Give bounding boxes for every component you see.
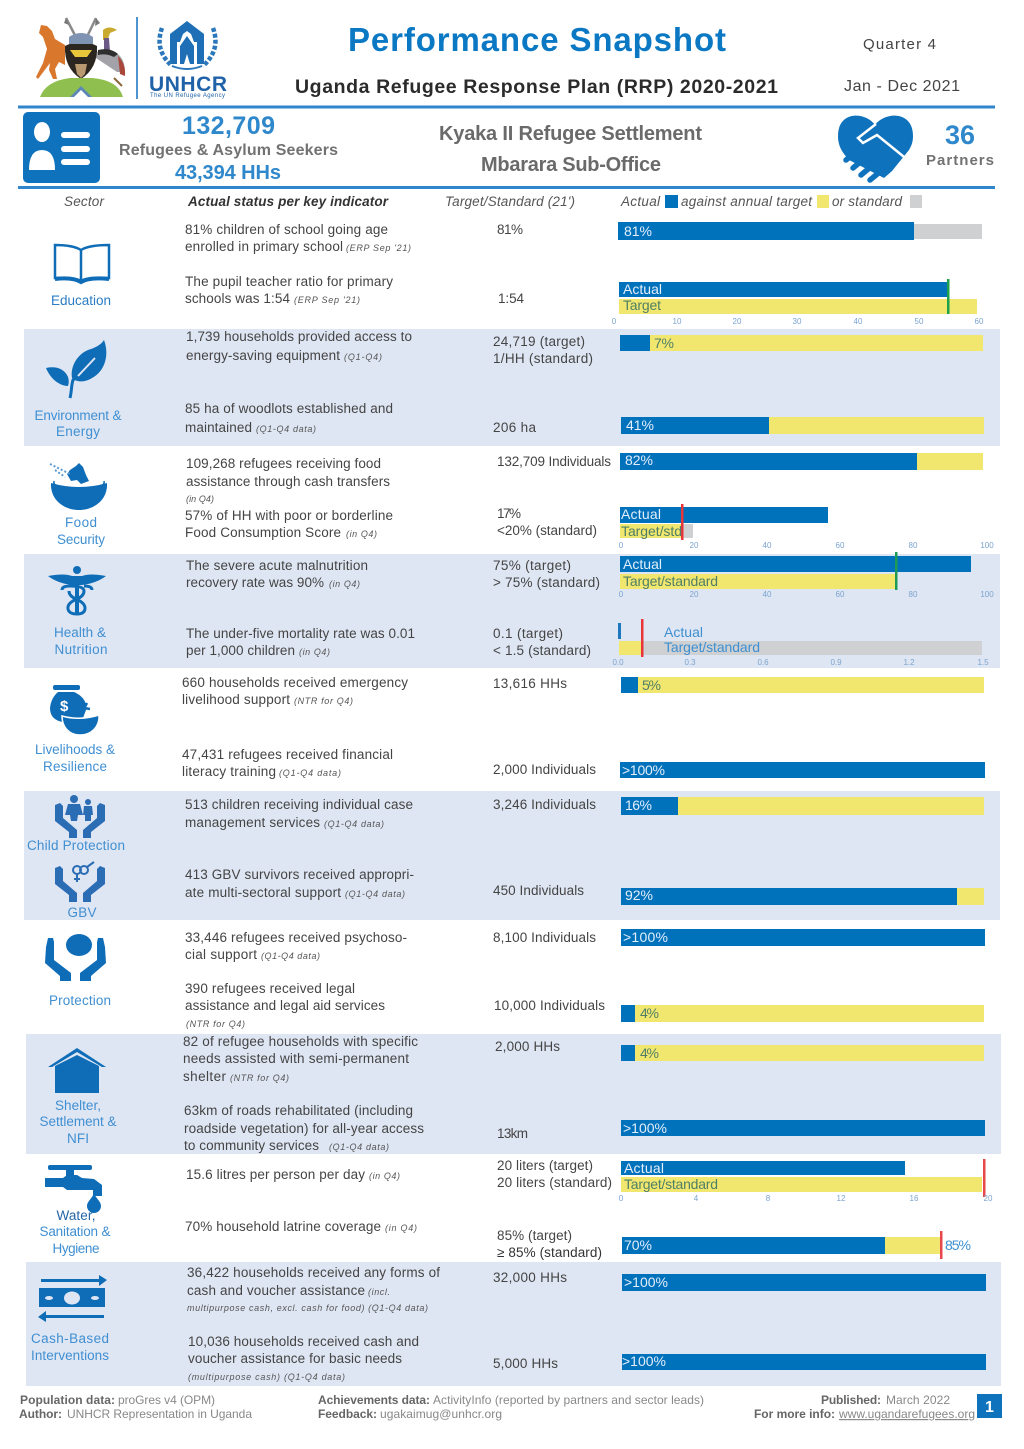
indicator: latrine coverage: ≥ 85% (standard) xyxy=(497,1245,602,1260)
indicator: malnutrition recovery: 75% (target) xyxy=(493,558,571,573)
indicator: latrine coverage xyxy=(185,1219,602,1260)
footer: achievements source xyxy=(318,1393,704,1421)
chart: food consumption score: 40 xyxy=(763,541,772,550)
indicator: emergency livelihood support: 13,616 HHs xyxy=(493,676,567,691)
column headers xyxy=(64,194,922,209)
chart: litres per person: Actual xyxy=(624,1160,664,1176)
indicator: emergency livelihood support: livelihood support xyxy=(182,692,290,707)
indicator: legal assistance xyxy=(185,981,605,1029)
bar: cash and voucher over 100% xyxy=(622,1274,986,1291)
bar: case management 16% xyxy=(621,797,984,815)
icon: UNHCR logo: UNHCR xyxy=(149,73,227,96)
indicator: under-five mortality: (in Q4) xyxy=(299,647,330,657)
bar: cash and voucher over 100%: >100% xyxy=(624,1274,668,1290)
chart: pupil teacher ratio: 60 xyxy=(975,317,984,326)
chart: food consumption score: 0 xyxy=(619,541,624,550)
population count: 132,709 xyxy=(182,112,275,140)
indicator: financial literacy: 47,431 refugees received financial xyxy=(182,747,393,762)
chart: litres per person: 20 xyxy=(984,1194,993,1203)
icon: handshake heart xyxy=(838,116,913,180)
bar: psychosocial over 100% xyxy=(621,929,985,946)
indicator: financial literacy xyxy=(182,747,596,779)
chart: under-five mortality: 1.2 xyxy=(903,658,915,667)
indicator: litres per person: 20 liters (standard) xyxy=(497,1175,612,1190)
icon: food bowl xyxy=(50,463,107,510)
indicator: woodlots: maintained xyxy=(185,420,252,435)
chart: food consumption score: 80 xyxy=(909,541,918,550)
bar: latrine coverage: 70% xyxy=(624,1237,652,1253)
icon: refugee id card xyxy=(23,112,100,183)
chart: litres per person: 12 xyxy=(837,1194,846,1203)
sub-office name: Mbarara Sub-Office xyxy=(481,154,661,176)
panel: food security xyxy=(50,452,994,550)
indicator: roads rehabilitated xyxy=(184,1103,528,1153)
indicator: energy-saving equipment: 24,719 (target) xyxy=(493,334,585,349)
indicator: child case management xyxy=(185,797,596,830)
indicator: roads rehabilitated: 13km xyxy=(497,1126,528,1141)
footer: publication info: www.ugandarefugees.org xyxy=(838,1407,975,1421)
indicator: psychosocial support xyxy=(185,930,596,962)
label: GBV: GBV xyxy=(68,905,96,920)
bar: basic needs over 100%: >100% xyxy=(622,1353,666,1369)
partners label: Partners xyxy=(926,152,994,169)
icon: water tap xyxy=(45,1165,102,1213)
indicator: pupil teacher ratio: schools was 1:54 xyxy=(185,291,290,306)
indicator: basic needs: 10,036 households received cash and xyxy=(188,1334,419,1349)
footer: publication info xyxy=(754,1393,975,1421)
icon: hands with children xyxy=(55,795,105,838)
indicator: malnutrition recovery: recovery rate was 90% xyxy=(186,575,324,590)
panel: food security: Security xyxy=(57,532,105,547)
indicator: pupil teacher ratio xyxy=(185,274,524,306)
indicator: psychosocial support: (Q1-Q4 data) xyxy=(261,951,320,961)
bar: financial literacy over 100% xyxy=(620,762,985,778)
chart: litres per person: 16 xyxy=(910,1194,919,1203)
indicator: malnutrition recovery: (in Q4) xyxy=(329,579,360,589)
indicator: food cash transfers: (in Q4) xyxy=(186,494,214,504)
indicator: child case management: 3,246 Individuals xyxy=(493,797,596,812)
label: cash-based interventions: Cash-Based xyxy=(31,1331,109,1346)
icon: money bag and bowl xyxy=(50,685,99,735)
indicator: woodlots xyxy=(185,401,536,435)
indicator: roads rehabilitated: to community services xyxy=(184,1138,319,1153)
chart: malnutrition recovery: Target/standard xyxy=(623,573,718,589)
panel: shelter, settlement and NFI: NFI xyxy=(67,1131,89,1146)
indicator: semi-permanent shelter: needs assisted with semi-permanent xyxy=(183,1051,409,1066)
indicator: latrine coverage: 85% (target) xyxy=(497,1228,572,1243)
icon: cash transfer xyxy=(38,1275,107,1322)
bar: legal 4%: 4% xyxy=(640,1005,659,1021)
indicator: energy-saving equipment: 1/HH (standard) xyxy=(493,351,593,366)
indicator: child case management: management services xyxy=(185,815,320,830)
label: child protection: Child Protection xyxy=(27,838,125,853)
bar: legal 4% xyxy=(621,1005,984,1022)
indicator: emergency livelihood support: 660 households received emergency xyxy=(182,675,408,690)
icon: caduceus xyxy=(48,566,106,614)
chart: under-five mortality: Actual xyxy=(664,624,703,640)
indicator: GBV survivors: ate multi-sectoral support xyxy=(185,885,341,900)
indicator: malnutrition recovery: > 75% (standard) xyxy=(493,575,600,590)
indicator: school enrolment: enrolled in primary school xyxy=(185,239,343,254)
indicator: energy-saving equipment xyxy=(186,329,593,366)
footer: achievements source: Feedback: xyxy=(318,1407,377,1421)
chart: pupil teacher ratio: 40 xyxy=(854,317,863,326)
chart: malnutrition recovery: Actual xyxy=(623,556,662,572)
footer: population source: Author: xyxy=(19,1407,62,1421)
bar: GBV 92% xyxy=(621,887,984,905)
indicator: GBV survivors: 413 GBV survivors received appropri- xyxy=(185,867,414,882)
indicator: GBV survivors: 450 Individuals xyxy=(493,883,584,898)
chart: malnutrition recovery: 0 xyxy=(619,590,624,599)
column headers: or standard xyxy=(832,194,902,209)
indicator: food consumption score: <20% (standard) xyxy=(497,523,597,538)
chart: under-five mortality: Target/standard xyxy=(664,639,760,655)
households count: 43,394 HHs xyxy=(175,162,281,184)
indicator: GBV survivors: (Q1-Q4 data) xyxy=(345,889,405,899)
panel: environment and energy xyxy=(24,329,1000,446)
indicator: latrine coverage: (in Q4) xyxy=(385,1223,417,1233)
panel: cash-based interventions xyxy=(26,1262,1001,1386)
bar: psychosocial over 100%: >100% xyxy=(623,929,668,945)
indicator: psychosocial support: cial support xyxy=(185,947,257,962)
divider line between logos xyxy=(136,17,138,99)
indicator: child case management: 513 children receiving individual case xyxy=(185,797,413,812)
indicator: food consumption score: (in Q4) xyxy=(346,529,377,539)
bar: woodlots 41%: 41% xyxy=(626,417,654,433)
indicator: pupil teacher ratio: (ERP Sep '21) xyxy=(294,295,360,305)
footer: population source: proGres v4 (OPM) xyxy=(118,1393,215,1407)
indicator: school enrolment xyxy=(185,222,523,254)
indicator: woodlots: 206 ha xyxy=(493,420,536,435)
footer: population source xyxy=(19,1393,252,1421)
indicator: child case management: (Q1-Q4 data) xyxy=(324,819,384,829)
chart: pupil teacher ratio: 50 xyxy=(915,317,924,326)
label: livelihoods and resilience: Livelihoods & xyxy=(35,742,115,757)
chart: pupil teacher ratio: 10 xyxy=(673,317,682,326)
indicator: roads rehabilitated: 63km of roads rehabilitated (including xyxy=(184,1103,413,1118)
footer: population source: UNHCR Representation in Uganda xyxy=(67,1407,252,1421)
chart: under-five mortality: 0.3 xyxy=(684,658,696,667)
bar: roads over 100%: >100% xyxy=(623,1120,667,1136)
bar: financial literacy over 100%: >100% xyxy=(622,762,665,778)
panel: cash-based interventions: Interventions xyxy=(31,1348,109,1363)
panel: health and nutrition xyxy=(24,552,1000,668)
indicator: food consumption score: Food Consumption Score xyxy=(185,525,341,540)
label: food security: Food xyxy=(65,515,97,530)
indicator: pupil teacher ratio: 1:54 xyxy=(498,291,524,306)
bar: woodlots 41% xyxy=(621,417,984,434)
page number: 1 xyxy=(985,1399,994,1416)
period: Jan - Dec 2021 xyxy=(844,78,960,95)
panel: health and nutrition: Nutrition xyxy=(54,642,108,657)
chart: pupil teacher ratio: 20 xyxy=(733,317,742,326)
indicator: semi-permanent shelter xyxy=(183,1034,560,1084)
chart: food consumption score: 100 xyxy=(980,541,994,550)
indicator: malnutrition recovery xyxy=(186,558,600,590)
icon: book xyxy=(55,245,109,282)
indicator: semi-permanent shelter: shelter xyxy=(183,1069,226,1084)
partners count: 36 xyxy=(945,120,975,150)
indicator: financial literacy: literacy training xyxy=(182,764,276,779)
indicator: legal assistance: 390 refugees received legal xyxy=(185,981,355,996)
indicator: psychosocial support: 33,446 refugees received psychoso- xyxy=(185,930,407,945)
panel: environment and energy: Energy xyxy=(56,424,100,439)
indicator: GBV survivors xyxy=(185,867,584,900)
column headers: Actual status per key indicator xyxy=(187,194,389,209)
bar: shelter 4% xyxy=(621,1045,984,1061)
indicator: financial literacy: 2,000 Individuals xyxy=(493,762,596,777)
indicator: legal assistance: (NTR for Q4) xyxy=(186,1019,245,1029)
footer: publication info: For more info: xyxy=(754,1407,835,1421)
chart: under-five mortality: 0.0 xyxy=(612,658,624,667)
chart: under-five mortality: 1.5 xyxy=(977,658,989,667)
bar: shelter 4%: 4% xyxy=(640,1045,659,1061)
chart: pupil teacher ratio: 30 xyxy=(793,317,802,326)
indicator: financial literacy: (Q1-Q4 data) xyxy=(279,768,341,778)
chart: malnutrition recovery xyxy=(619,552,994,599)
chart: under-five mortality: 0.9 xyxy=(830,658,842,667)
bar: case management 16%: 16% xyxy=(625,797,652,813)
panel: protection xyxy=(45,929,985,1029)
indicator: legal assistance: assistance and legal aid services xyxy=(185,998,385,1013)
bar: food 82%: 82% xyxy=(625,452,653,468)
indicator: semi-permanent shelter: (NTR for Q4) xyxy=(230,1073,289,1083)
indicator: semi-permanent shelter: 2,000 HHs xyxy=(495,1039,560,1054)
indicator: food cash transfers xyxy=(186,454,611,504)
indicator: under-five mortality: The under-five mortality rate was 0.01 xyxy=(186,626,415,641)
indicator: litres per person: 15.6 litres per person per day xyxy=(186,1167,365,1182)
column headers: against annual target xyxy=(681,194,813,209)
footer xyxy=(19,1393,1002,1421)
label: education: Education xyxy=(51,293,111,308)
bar: food 82% xyxy=(620,452,983,470)
chart: food consumption score: Target/std xyxy=(621,523,682,539)
chart: under-five mortality xyxy=(612,619,989,667)
panel: water, sanitation and hygiene: Hygiene xyxy=(52,1241,100,1256)
indicator: school enrolment: 81% children of school going age xyxy=(185,222,388,237)
chart: food consumption score xyxy=(619,504,994,550)
label: protection: Protection xyxy=(49,993,111,1008)
chart: litres per person: Target/standard xyxy=(624,1176,718,1192)
icon: leaf xyxy=(46,340,106,398)
column headers: Actual xyxy=(620,194,661,209)
icon: hands with gender symbols xyxy=(55,862,105,902)
chart: litres per person: 8 xyxy=(766,1194,771,1203)
footer: achievements source: ugakaimug@unhcr.org xyxy=(380,1407,502,1421)
bar: energy 7% xyxy=(620,335,983,351)
label: environment and energy: Environment & xyxy=(34,408,122,423)
footer: publication info: March 2022 xyxy=(886,1393,950,1407)
icon: UNHCR logo: The UN Refugee Agency xyxy=(150,93,225,99)
quarter: Quarter 4 xyxy=(863,36,936,53)
chart: pupil teacher ratio: Actual xyxy=(623,281,662,297)
indicator: woodlots: 85 ha of woodlots established and xyxy=(185,401,393,416)
indicator: latrine coverage: 70% household latrine coverage xyxy=(185,1219,381,1234)
chart: pupil teacher ratio: 0 xyxy=(612,317,617,326)
indicator: woodlots: (Q1-Q4 data) xyxy=(256,424,316,434)
indicator: psychosocial support: 8,100 Individuals xyxy=(493,930,596,945)
population label: Refugees & Asylum Seekers xyxy=(119,142,338,159)
indicator: under-five mortality: < 1.5 (standard) xyxy=(493,643,591,658)
indicator: basic needs xyxy=(188,1334,558,1382)
indicator: pupil teacher ratio: The pupil teacher ratio for primary xyxy=(185,274,393,289)
column headers: Target/Standard (21') xyxy=(445,194,575,209)
chart: malnutrition recovery: 20 xyxy=(690,590,699,599)
panel: livelihoods and resilience xyxy=(35,675,985,779)
icon: Uganda coat of arms xyxy=(36,18,125,97)
indicator: energy-saving equipment: energy-saving equipment xyxy=(186,348,340,363)
icon: house xyxy=(48,1048,106,1093)
bar: latrine coverage xyxy=(622,1231,971,1259)
indicator: cash and voucher assistance: (incl. xyxy=(368,1287,390,1297)
panel: water, sanitation and hygiene: Sanitation & xyxy=(40,1224,110,1239)
icon: UNHCR logo xyxy=(149,21,227,99)
bar: basic needs over 100% xyxy=(622,1353,986,1370)
indicator: litres per person: (in Q4) xyxy=(369,1171,400,1181)
indicator: food cash transfers: 109,268 refugees receiving food xyxy=(186,456,381,471)
chart: litres per person: 4 xyxy=(694,1194,699,1203)
subtitle: Uganda Refugee Response Plan (RRP) 2020-2021 xyxy=(295,76,778,98)
indicator: litres per person xyxy=(186,1158,612,1190)
bar: roads over 100% xyxy=(621,1120,985,1136)
indicator: food cash transfers: 132,709 Individuals xyxy=(497,454,611,469)
bar: enrolment 81% xyxy=(618,222,982,240)
indicator: energy-saving equipment: 1,739 households provided access to xyxy=(186,329,412,344)
chart: malnutrition recovery: 60 xyxy=(836,590,845,599)
chart: pupil teacher ratio: Target xyxy=(623,297,661,313)
indicator: under-five mortality xyxy=(186,626,591,658)
title: Performance Snapshot xyxy=(348,21,726,58)
page number xyxy=(977,1394,1002,1418)
bar: energy 7%: 7% xyxy=(654,335,674,351)
panel: shelter, settlement and NFI: Settlement & xyxy=(40,1114,116,1129)
indicator: school enrolment: (ERP Sep '21) xyxy=(346,243,411,253)
indicator: cash and voucher assistance xyxy=(187,1265,567,1313)
summary band xyxy=(23,112,994,184)
chart: food consumption score: 60 xyxy=(836,541,845,550)
indicator: cash and voucher assistance: 32,000 HHs xyxy=(493,1270,567,1285)
bar: enrolment 81%: 81% xyxy=(624,223,652,239)
chart: food consumption score: Actual xyxy=(621,506,661,522)
footer: publication info: Published: xyxy=(821,1393,881,1407)
bar: latrine coverage: 85% xyxy=(945,1237,971,1253)
indicator: litres per person: 20 liters (target) xyxy=(497,1158,593,1173)
indicator: roads rehabilitated: (Q1-Q4 data) xyxy=(329,1142,389,1152)
indicator: food consumption score: 57% of HH with poor or borderline xyxy=(185,508,393,523)
indicator: food consumption score xyxy=(185,506,597,540)
label: health and nutrition: Health & xyxy=(54,625,106,640)
indicator: school enrolment: 81% xyxy=(497,222,523,237)
indicator: semi-permanent shelter: 82 of refugee households with specific xyxy=(183,1034,418,1049)
indicator: roads rehabilitated: roadside vegetation) for all-year access xyxy=(184,1121,424,1136)
label: shelter, settlement and NFI: Shelter, xyxy=(55,1098,101,1113)
bar: livelihood 5% xyxy=(621,677,984,693)
panel: education xyxy=(51,222,984,326)
indicator: cash and voucher assistance: 36,422 households received any forms of xyxy=(187,1265,440,1280)
bar: livelihood 5%: 5% xyxy=(642,677,661,693)
panel: child protection and GBV xyxy=(24,791,1000,920)
chart: under-five mortality: 0.6 xyxy=(757,658,769,667)
bar: GBV 92%: 92% xyxy=(625,887,653,903)
footer: achievements source: ActivityInfo (reported by partners and sector leads) xyxy=(433,1393,704,1407)
indicator: under-five mortality: 0.1 (target) xyxy=(493,626,563,641)
indicator: cash and voucher assistance: multipurpose cash, excl. cash for food) (Q1-Q4 data) xyxy=(187,1303,428,1313)
indicator: basic needs: 5,000 HHs xyxy=(493,1356,558,1371)
header xyxy=(36,17,960,99)
icon: protecting hands xyxy=(45,934,106,981)
panel: shelter, settlement and NFI xyxy=(26,1034,1001,1154)
chart: malnutrition recovery: 40 xyxy=(763,590,772,599)
indicator: basic needs: (multipurpose cash) (Q1-Q4 data) xyxy=(188,1372,345,1382)
footer: achievements source: Achievements data: xyxy=(318,1393,430,1407)
indicator: under-five mortality: per 1,000 children xyxy=(186,643,295,658)
indicator: malnutrition recovery: The severe acute malnutrition xyxy=(186,558,368,573)
indicator: energy-saving equipment: (Q1-Q4) xyxy=(344,352,382,362)
settlement name: Kyaka II Refugee Settlement xyxy=(439,123,702,145)
chart: malnutrition recovery: 100 xyxy=(980,590,994,599)
chart: litres per person: 0 xyxy=(619,1194,624,1203)
chart: pupil teacher ratio xyxy=(612,279,984,326)
chart: food consumption score: 20 xyxy=(690,541,699,550)
indicator: legal assistance: 10,000 Individuals xyxy=(494,998,605,1013)
panel: water, sanitation and hygiene xyxy=(40,1158,993,1260)
indicator: emergency livelihood support: (NTR for Q4) xyxy=(294,696,353,706)
label: water, sanitation and hygiene: Water, xyxy=(56,1208,96,1223)
panel: livelihoods and resilience: Resilience xyxy=(43,759,107,774)
chart: litres per person xyxy=(619,1159,993,1203)
indicator: cash and voucher assistance: cash and voucher assistance xyxy=(187,1283,365,1298)
chart: malnutrition recovery: 80 xyxy=(909,590,918,599)
indicator: food cash transfers: assistance through cash transfers xyxy=(186,474,390,489)
footer: population source: Population data: xyxy=(20,1393,115,1407)
indicator: emergency livelihood support xyxy=(182,675,567,707)
column headers: Sector xyxy=(64,194,104,209)
icon: money bag and bowl: $ xyxy=(60,698,69,715)
indicator: food consumption score: 17% xyxy=(497,506,521,521)
indicator: basic needs: voucher assistance for basic needs xyxy=(188,1351,402,1366)
